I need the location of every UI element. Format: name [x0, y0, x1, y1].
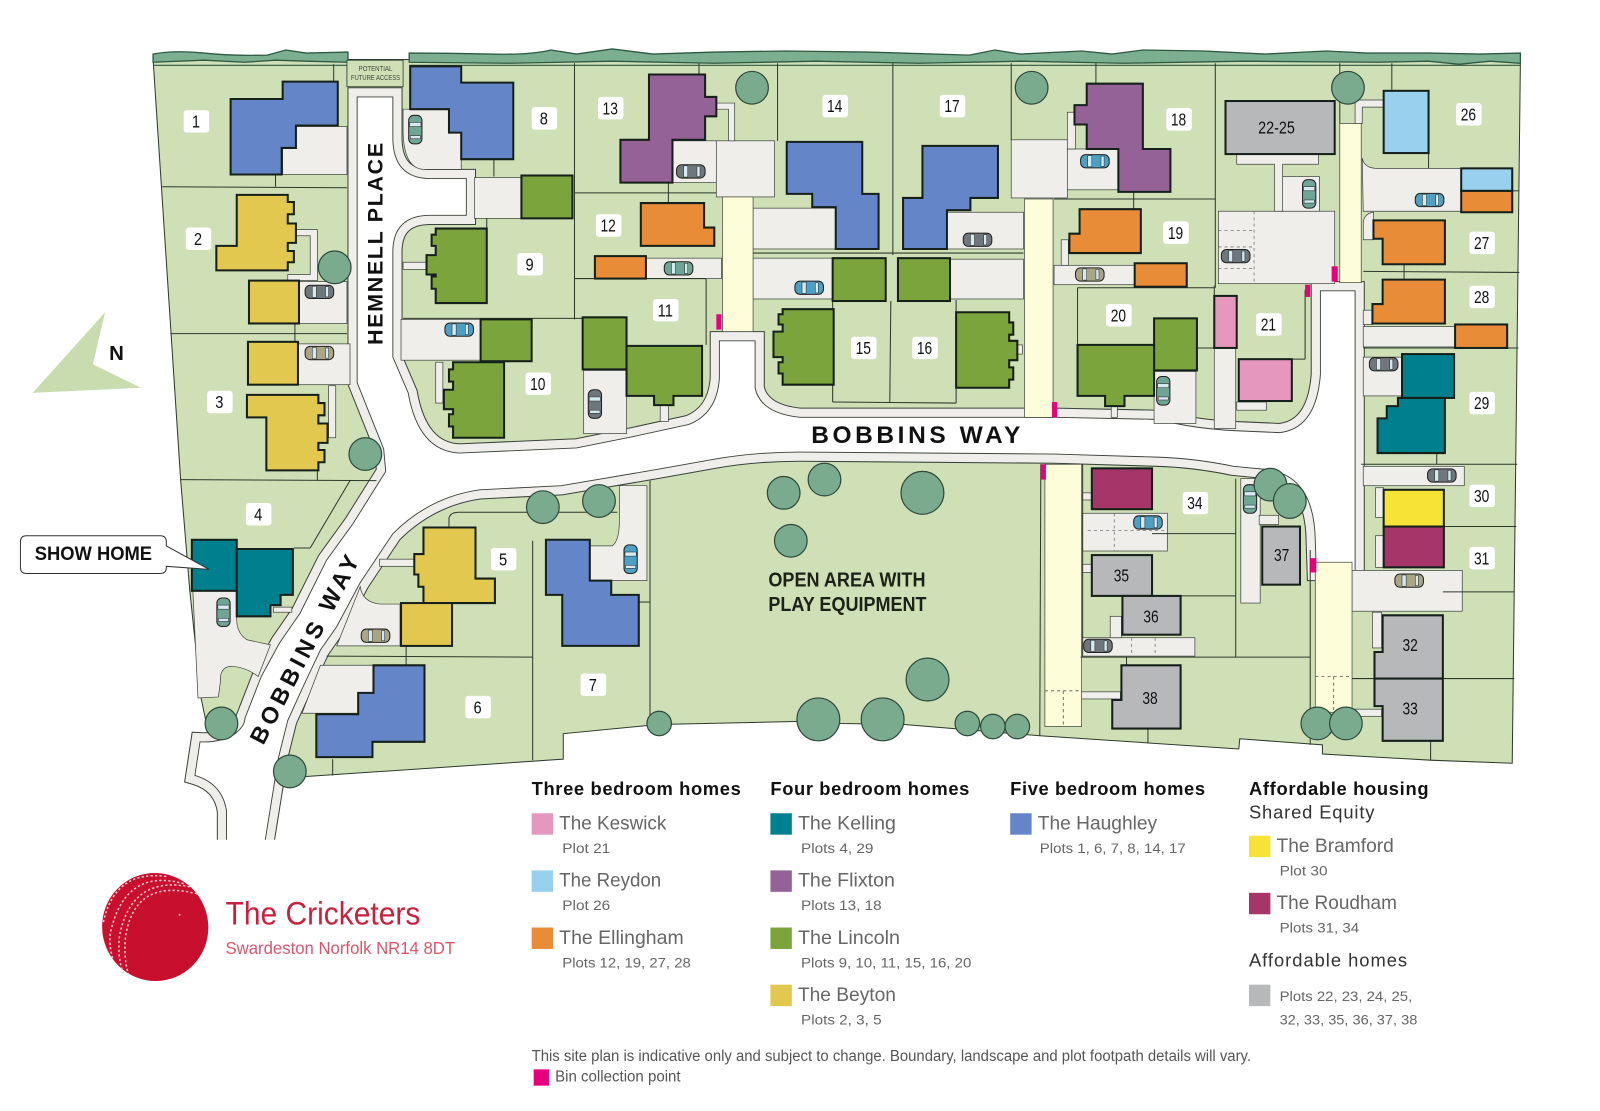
legend: four bedroom homes: Plots 9, 10, 11, 15, 16, 20 [801, 955, 971, 971]
legend: three bedroom homes: The Ellingham [559, 927, 684, 949]
driveways and shared surfaces [193, 100, 1464, 716]
plot number labels: 27 [1474, 233, 1489, 253]
plot 27 garage [1461, 191, 1512, 212]
plot number labels: 26 [1461, 104, 1476, 124]
legend: three bedroom homes [532, 778, 741, 971]
plot number labels: 20 [1111, 305, 1126, 325]
plot 13 house [620, 74, 716, 183]
legend: three bedroom homes: Three bedroom homes [532, 778, 741, 799]
legend: affordable housing: Plots 22, 23, 24, 25, [1280, 989, 1412, 1005]
legend: affordable housing: Plot 30 [1280, 863, 1328, 879]
legend: four bedroom homes: The Flixton [798, 870, 895, 892]
plot 28 garage [1455, 324, 1507, 348]
plot 10 garage [481, 319, 532, 361]
plot 17 house [903, 146, 998, 249]
plot number labels: 9 [526, 254, 534, 274]
open area label: OPEN AREA WITH [768, 570, 926, 592]
road name: Bobbins Way diagonal: BOBBINS WAY [245, 550, 364, 748]
plot 14 house [787, 142, 879, 249]
plot 1 house [231, 82, 338, 174]
plot number labels: 13 [603, 98, 618, 118]
open area label: PLAY EQUIPMENT [768, 594, 927, 616]
plot number labels: 14 [827, 96, 843, 116]
logo title: The Cricketers [226, 894, 420, 931]
show home plot 4 house [237, 549, 293, 616]
plot 3 garage [248, 342, 298, 385]
plots 22-25 block [1226, 101, 1335, 154]
legend: affordable housing: Affordable housing [1249, 778, 1429, 799]
plot 12 house [641, 203, 714, 246]
plot number labels: 19 [1168, 223, 1183, 243]
legend: four bedroom homes: Plots 2, 3, 5 [801, 1012, 882, 1028]
plot 19 garage [1135, 263, 1187, 287]
plot 11 garage [583, 317, 627, 369]
cars [217, 115, 1456, 653]
plot 8 house [410, 66, 513, 159]
plot number labels: 33 [1403, 698, 1418, 718]
legend: five bedroom homes: Plots 1, 6, 7, 8, 14, 17 [1040, 841, 1186, 857]
plot 15 garage [833, 258, 886, 301]
plot 18 house [1074, 84, 1170, 192]
legend: affordable housing: Plots 31, 34 [1280, 921, 1359, 937]
legend: affordable housing: Shared Equity [1249, 801, 1375, 822]
plot 19 house [1069, 209, 1141, 253]
legend: three bedroom homes: The Reydon [559, 870, 661, 892]
plots 32 and 33 block [1374, 615, 1443, 741]
plot 9 garage [521, 176, 572, 218]
plot number labels: 3 [215, 392, 223, 412]
north arrow: N [109, 343, 124, 365]
plot boundaries [162, 63, 1519, 775]
plot 3 house [247, 395, 328, 470]
plot 21 The Keswick (pink) [1214, 296, 1292, 401]
legend: affordable housing: The Roudham [1277, 892, 1397, 914]
north arrow [33, 312, 141, 393]
legend: four bedroom homes: Plots 13, 18 [801, 898, 882, 914]
plot number labels: 1 [192, 112, 200, 132]
logo: cricket ball [92, 863, 218, 991]
plot 20 house [1078, 345, 1154, 406]
trees [205, 71, 1364, 788]
plot number labels [184, 95, 1495, 718]
open area label [768, 570, 927, 616]
legend: affordable housing: Affordable homes [1249, 949, 1407, 970]
legend: affordable housing: The Bramford [1277, 835, 1394, 857]
plot 15 house [773, 309, 834, 385]
roads with footpaths [195, 97, 1355, 852]
plot 38 house [1112, 665, 1181, 729]
legend: four bedroom homes: The Lincoln [798, 927, 900, 949]
The Roudham houses (plum) [1092, 468, 1444, 567]
plot number labels: 17 [944, 96, 960, 116]
plot 16 garage [898, 258, 950, 301]
plot number labels: 30 [1474, 486, 1489, 506]
logo address: Swardeston Norfolk NR14 8DT [226, 938, 456, 958]
plot 29 garage [1402, 354, 1454, 398]
plot 9 house [427, 229, 487, 303]
plot number labels: 18 [1171, 110, 1186, 130]
legend: three bedroom homes: The Keswick [559, 813, 667, 835]
road name: Hemnell Place: HEMNELL PLACE [364, 143, 388, 345]
plot 31 house [1384, 527, 1444, 567]
plot number labels: 21 [1261, 315, 1276, 335]
plot 36 house [1122, 596, 1181, 635]
plot number labels: 29 [1474, 393, 1489, 413]
plot 2 house [216, 195, 296, 270]
The Beyton houses (yellow) [216, 195, 495, 646]
plot 10 house [444, 362, 504, 438]
legend: three bedroom homes: Plot 21 [562, 841, 610, 857]
plot number labels: 8 [540, 108, 548, 128]
road name: Bobbins Way main: BOBBINS WAY [811, 422, 1020, 449]
legend: four bedroom homes: The Beyton [798, 984, 896, 1006]
plot 28 house [1372, 280, 1445, 323]
plot 30 The Bramford (bright yellow) [1384, 490, 1444, 527]
legend: affordable housing: 32, 33, 35, 36, 37, 38 [1280, 1012, 1417, 1028]
disclaimer: This site plan is indicative only and subject to change. Boundary, landscape and plot footpath details will vary. [532, 1048, 1251, 1065]
plot 5 house [414, 528, 495, 603]
plot number labels: 34 [1187, 493, 1203, 513]
plot 37 house [1262, 527, 1300, 585]
plot 7 house [546, 540, 639, 646]
plot number labels: 5 [499, 549, 507, 569]
The Haughley houses (blue) [231, 66, 998, 757]
plot 29 house [1378, 398, 1445, 453]
The Flixton houses (purple) [620, 74, 1170, 192]
plot 26 The Reydon (light blue) [1384, 91, 1512, 191]
site plan [153, 49, 1520, 852]
plot number labels: 38 [1142, 688, 1158, 708]
The Kelling houses (teal) [192, 354, 1454, 616]
bin collection key: Bin collection point [555, 1069, 681, 1086]
legend: four bedroom homes: Plots 4, 29 [801, 841, 874, 857]
plot 6 house [316, 665, 424, 757]
legend: four bedroom homes [770, 778, 971, 1028]
plot number labels: 10 [530, 374, 545, 394]
plot 35 house [1092, 555, 1152, 596]
legend: affordable housing [1249, 778, 1429, 1028]
bin collection points on plan [716, 266, 1338, 572]
legend: three bedroom homes: Plots 12, 19, 27, 28 [562, 955, 691, 971]
The Lincoln houses (green) [427, 176, 1197, 438]
plot 34 house [1092, 468, 1152, 509]
plot number labels: 37 [1274, 545, 1289, 565]
hedge along the northern boundary [153, 49, 1520, 65]
mask below the plan where road ends [173, 840, 296, 870]
plot number labels: 7 [589, 675, 597, 695]
plot 16 house [956, 312, 1017, 388]
legend: five bedroom homes [1010, 778, 1205, 857]
plot number labels: 32 [1403, 635, 1418, 655]
show home callout: SHOW HOME [35, 543, 152, 565]
plot number labels: 11 [658, 300, 673, 320]
plot 20 garage [1154, 318, 1197, 370]
plot 27 house [1373, 220, 1445, 264]
plot number labels: 15 [856, 338, 871, 358]
legend: five bedroom homes: Five bedroom homes [1010, 778, 1205, 799]
plot number labels: 35 [1114, 566, 1129, 586]
plot 2 garage [249, 281, 299, 323]
plot number labels: 22-25 [1258, 118, 1295, 138]
plot number labels: 36 [1143, 606, 1159, 626]
plot number labels: 12 [601, 216, 616, 236]
show home callout [20, 536, 209, 573]
The Ellingham houses (orange) [595, 191, 1512, 348]
plot number labels: 4 [254, 504, 263, 524]
potential future access strip [347, 60, 403, 87]
plot number labels: 2 [194, 229, 202, 249]
legend: three bedroom homes: Plot 26 [562, 898, 610, 914]
plot 12 garage [595, 256, 646, 279]
potential future access strip: POTENTIAL [359, 64, 392, 73]
ground: plots and open area [153, 59, 1520, 781]
legend: five bedroom homes: The Haughley [1038, 813, 1157, 835]
plot number labels: 28 [1474, 287, 1489, 307]
plot 5 garage [401, 603, 452, 646]
potential future access strip: FUTURE ACCESS [351, 73, 400, 82]
plot 11 house [627, 346, 702, 405]
plot number labels: 31 [1474, 548, 1489, 568]
legend: four bedroom homes: The Kelling [798, 813, 896, 835]
yellow shared lanes [722, 123, 1361, 727]
plot number labels: 6 [473, 697, 482, 717]
legend: four bedroom homes: Four bedroom homes [770, 778, 969, 799]
show home plot 4 garage [192, 540, 237, 591]
plot number labels: 16 [917, 338, 932, 358]
affordable homes (grey) [1092, 101, 1443, 741]
